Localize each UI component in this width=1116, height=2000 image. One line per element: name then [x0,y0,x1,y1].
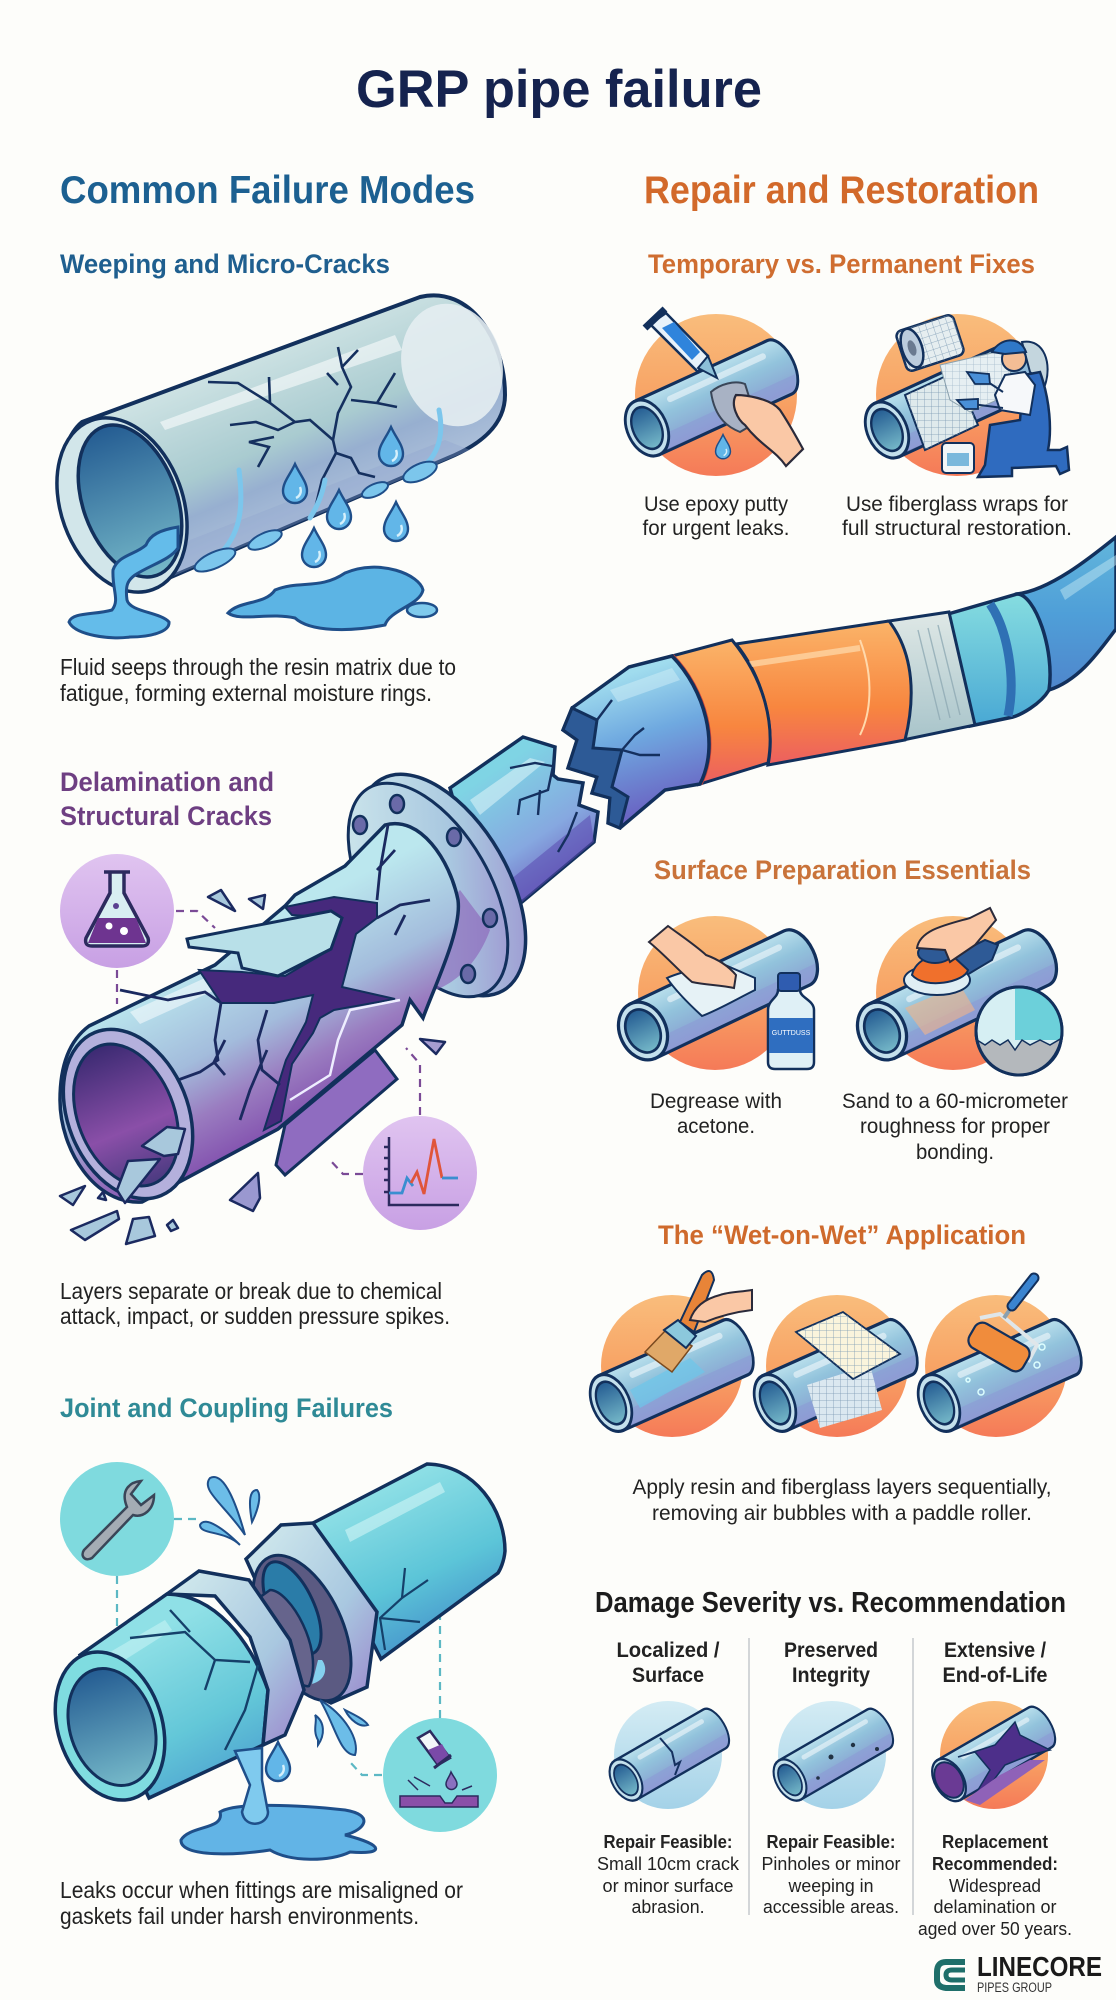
icon: chemical attack [383,1718,497,1832]
column: localized surface: abrasion. [632,1896,704,1917]
heading: Structural Cracks [60,801,272,831]
panel: joint and coupling failures [37,1393,505,1929]
column: localized surface: Surface [632,1663,704,1687]
column: preserved integrity: Pinholes or minor [762,1853,900,1874]
illustration: fiberglass mesh [746,1295,925,1438]
column: extensive end-of-life: Widespread [949,1875,1041,1896]
central pipe: repaired section [563,537,1116,828]
captions: acetone. [677,1114,755,1138]
illustration: degrease [609,916,826,1070]
connector lines [117,911,420,1174]
illustration: paddle roller [910,1278,1089,1438]
icon: chemical flask [60,854,174,968]
description: attack, impact, or sudden pressure spikes. [60,1303,450,1329]
logo: Linecore Pipes Group [937,1951,1102,1995]
column: localized surface: Repair Feasible: [604,1831,732,1852]
heading [60,767,274,831]
captions: Use epoxy putty [644,492,788,516]
caption: Apply resin and fiberglass layers sequentially, [632,1475,1052,1499]
description: gaskets fail under harsh environments. [60,1903,419,1929]
heading: Delamination and [60,767,274,797]
panel: damage severity vs recommendation [595,1587,1072,1939]
illustration: shattered pipe with flange [39,746,560,1244]
column: extensive end-of-life: delamination or [934,1896,1056,1917]
column: extensive end-of-life: End-of-Life [942,1663,1048,1687]
heading: common failure modes: Common Failure Modes [60,169,475,212]
captions: roughness for proper [860,1114,1050,1138]
illustration: epoxy putty [617,309,805,476]
column: extensive end-of-life: aged over 50 years. [918,1918,1072,1939]
caption: removing air bubbles with a paddle roller. [652,1501,1032,1525]
panel: temporary vs permanent fixes [617,249,1072,540]
column: localized surface: or minor surface [602,1875,734,1896]
captions [642,492,1072,540]
column: extensive end-of-life: Extensive / [944,1638,1046,1662]
captions: Use fiberglass wraps for [846,492,1068,516]
heading: Surface Preparation Essentials [654,855,1031,885]
illustration: fiberglass wrap with worker [857,314,1069,477]
panel: delamination and structural cracks [39,746,560,1329]
icon: pressure spike graph [363,1116,477,1230]
column: preserved integrity: Preserved [784,1638,878,1662]
caption [632,1475,1052,1525]
heading: Temporary vs. Permanent Fixes [648,249,1035,279]
description: Leaks occur when fittings are misaligned or [60,1877,463,1903]
heading: repair and restoration: Repair and Restoration [644,169,1039,212]
illustration: degrease: GUTTDUSS [772,1030,811,1037]
column: localized surface [597,1638,740,1917]
panel: surface preparation essentials [609,855,1068,1164]
column: extensive end-of-life: Recommended: [932,1853,1058,1874]
description: Layers separate or break due to chemical [60,1278,442,1304]
column: preserved integrity: accessible areas. [763,1896,899,1917]
connector lines [117,1519,440,1775]
captions: for urgent leaks. [642,516,790,540]
captions: full structural restoration. [842,516,1072,540]
illustration: resin brush [582,1271,761,1438]
column: preserved integrity: Integrity [792,1663,870,1687]
column: extensive end-of-life: Replacement [942,1831,1048,1852]
description [60,1278,450,1329]
description: Fluid seeps through the resin matrix due to [60,654,456,680]
heading: The “Wet-on-Wet” Application [658,1220,1026,1250]
column: extensive end-of-life [918,1638,1072,1939]
column: localized surface: Localized / [616,1638,720,1662]
captions [650,1089,1068,1164]
heading: Joint and Coupling Failures [60,1393,393,1423]
captions: bonding. [916,1140,994,1164]
column: preserved integrity: weeping in [788,1875,874,1896]
heading: Damage Severity vs. Recommendation [595,1587,1066,1619]
heading: Weeping and Micro-Cracks [60,249,390,279]
captions: Degrease with [650,1089,782,1113]
description [60,1877,463,1929]
icon: wrench [60,1462,174,1576]
panel: wet-on-wet application [582,1220,1089,1525]
logo: Linecore Pipes Group: PIPES GROUP [977,1980,1052,1995]
column: preserved integrity: Repair Feasible: [766,1831,896,1852]
description [60,654,456,706]
title: GRP pipe failure [356,60,762,119]
central pipe: broken section left of the fracture [450,737,598,902]
illustration: sanding [848,908,1065,1075]
illustration: failed coupling [37,1464,505,1859]
description: fatigue, forming external moisture rings. [60,680,432,706]
column: localized surface: Small 10cm crack [597,1853,740,1874]
captions: Sand to a 60-micrometer [842,1089,1068,1113]
illustration: cracked weeping pipe [34,292,516,638]
column: preserved integrity [762,1638,900,1917]
panel: weeping and micro-cracks [34,249,516,706]
